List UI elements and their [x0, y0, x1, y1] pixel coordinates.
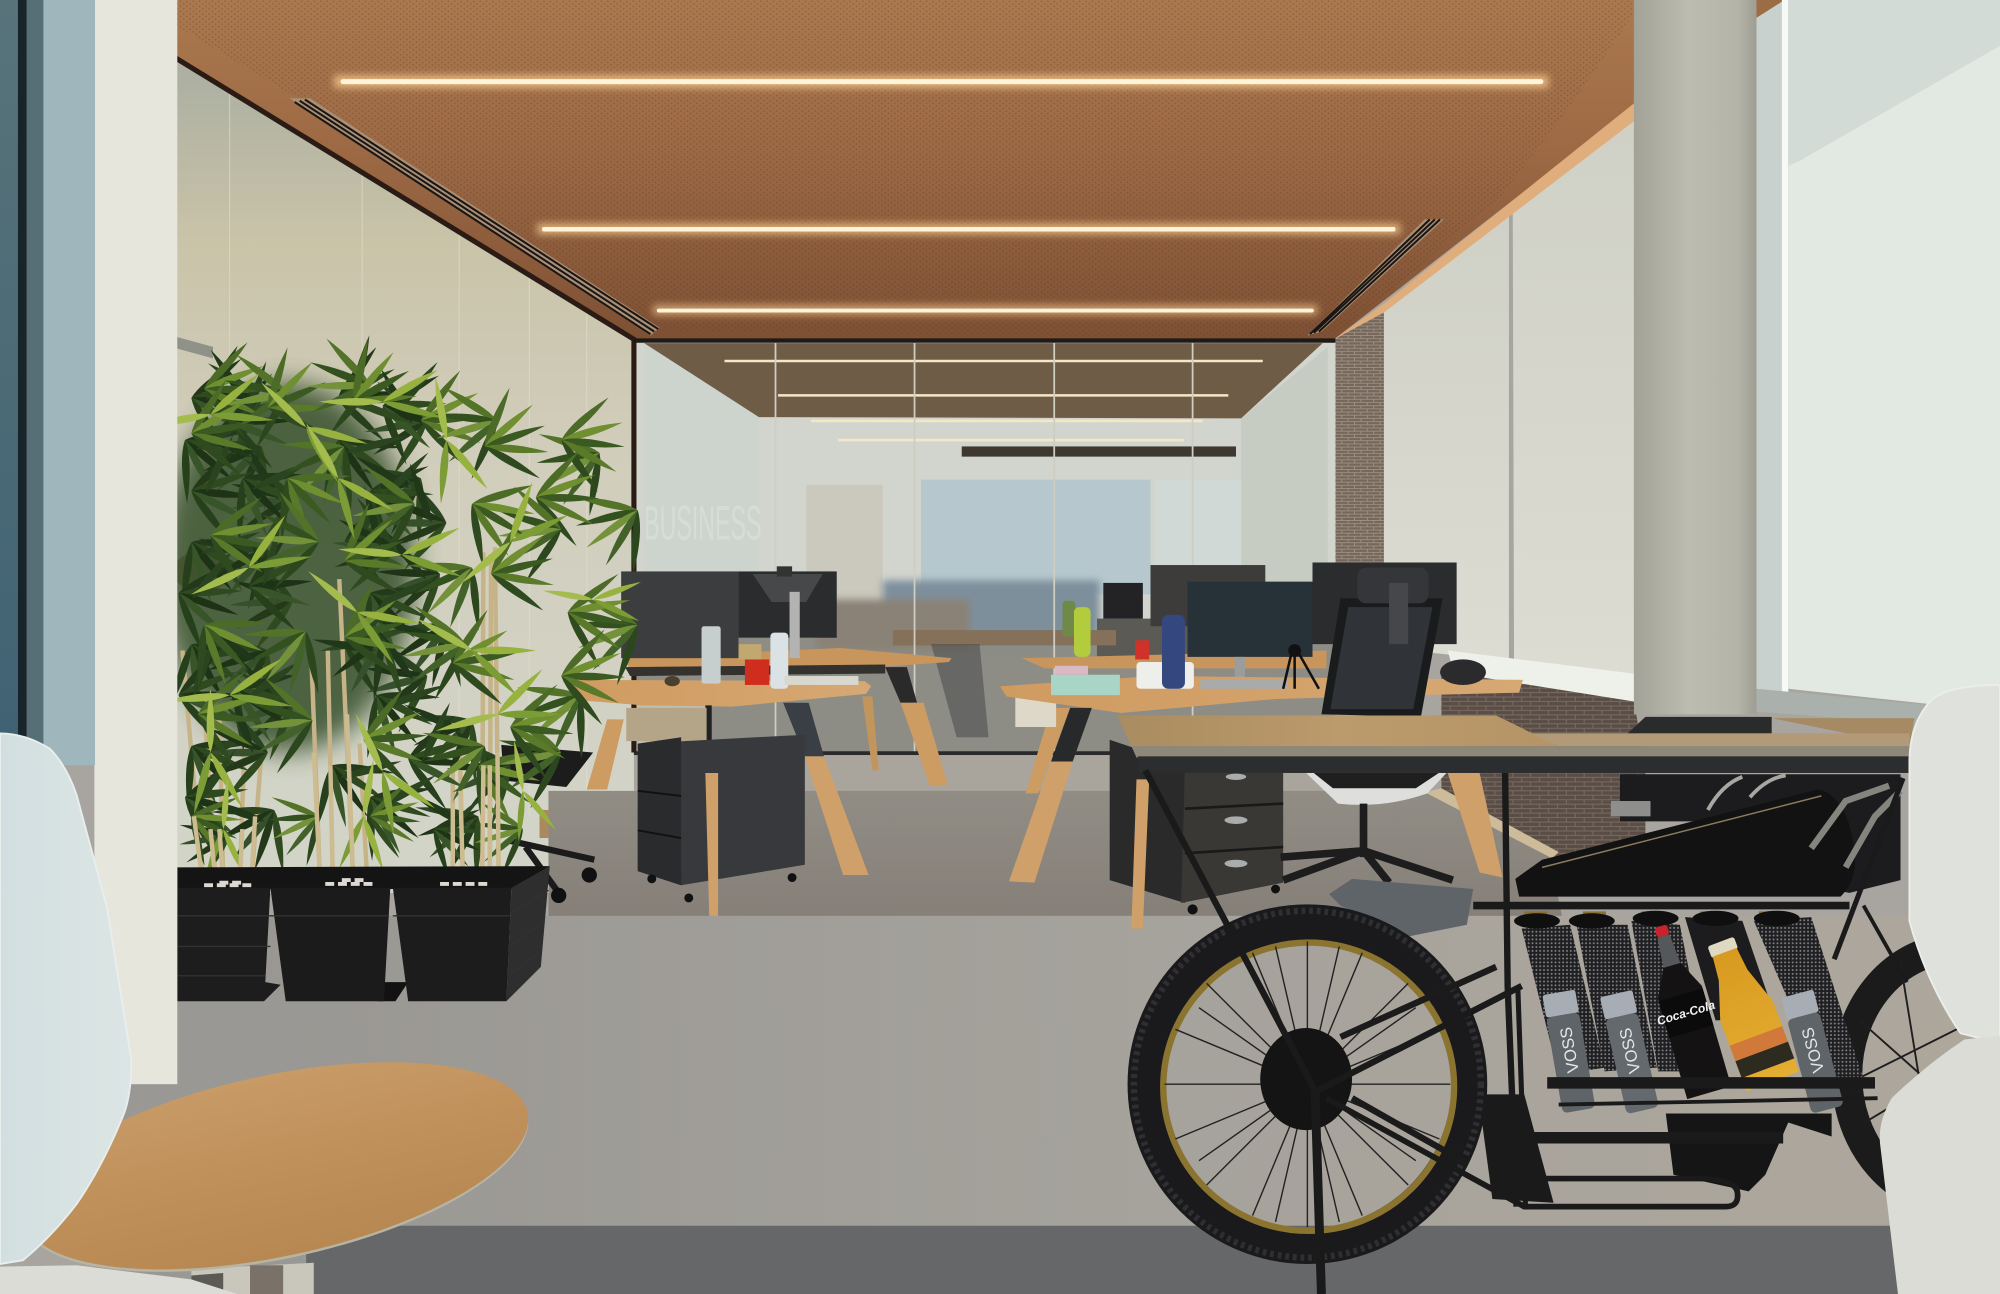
- bike table top: [1117, 716, 1909, 773]
- main floor: [176, 916, 2000, 1228]
- desk items left: [665, 626, 858, 689]
- chrome handlebar: [1811, 786, 1901, 867]
- cola bottle: Coca-Cola: [1655, 998, 1717, 1028]
- cola bottle: [1632, 918, 1738, 1101]
- window sill: [1448, 651, 1634, 703]
- plant foliage: [145, 331, 652, 891]
- front left desk leg: [705, 773, 718, 916]
- right desk legs: [1009, 708, 1503, 883]
- window strip: [1756, 0, 1788, 695]
- left wall top edge: [175, 57, 634, 753]
- far glass meeting room: [634, 339, 1335, 755]
- left desk legs: [587, 703, 869, 875]
- bottle rack mesh: [1514, 911, 1864, 1079]
- cardboard box: [626, 708, 707, 741]
- right blind far: [1384, 212, 1509, 661]
- water bottle three: VOSS: [1798, 1025, 1828, 1075]
- juice bottle: [1694, 932, 1799, 1091]
- baseboard: [1421, 788, 1559, 862]
- white wall pier: [94, 0, 177, 1084]
- bike seat: [1329, 879, 1473, 936]
- left desk top: [568, 680, 871, 707]
- back desks: [624, 648, 1327, 793]
- white armchair left back: [0, 733, 131, 1264]
- monitors right: [1103, 562, 1457, 682]
- back floor band: [634, 755, 1422, 791]
- ceiling light strip two: [537, 223, 1401, 235]
- right drawer unit: [1110, 740, 1283, 915]
- floor dark band: [302, 1226, 2000, 1294]
- monitors left: [621, 566, 837, 658]
- left wall: [176, 57, 638, 893]
- planter rim and pebbles: [177, 866, 550, 889]
- rear wood surface: [1772, 718, 1915, 746]
- chair behind plant: [501, 745, 597, 903]
- right rear wheel: [1847, 948, 2000, 1203]
- ceiling cove light: [1334, 103, 1634, 339]
- water bottle one: VOSS: [1556, 1026, 1583, 1074]
- carpet dark zone: [548, 791, 1562, 918]
- office chair: [1281, 568, 1453, 883]
- bike fuel tank: [1515, 790, 1855, 897]
- brick wall strip: [1335, 307, 1384, 568]
- front bike wheel: [1134, 911, 1496, 1258]
- ceiling light strip three: [653, 305, 1318, 315]
- water bottle three: [1781, 989, 1844, 1114]
- water bottle two: [1600, 990, 1659, 1114]
- ceiling: [176, 0, 1634, 339]
- water bottle two: VOSS: [1616, 1026, 1644, 1075]
- white armchair right seat: [1880, 1036, 2000, 1294]
- desk items right: [1051, 601, 1486, 695]
- bike engine block: [1478, 1094, 1832, 1203]
- blue-grey window frame: [43, 0, 95, 765]
- low table base: [191, 1263, 314, 1294]
- right window: [1756, 0, 2000, 730]
- far glass meeting room: BUSINESS: [644, 497, 761, 551]
- dark mass behind tank: [1611, 774, 1901, 893]
- air slot left: [290, 98, 659, 335]
- lower-left floor: [94, 995, 306, 1294]
- lower brick wall: [1441, 671, 1645, 880]
- bike frame: [1145, 770, 1907, 1294]
- concrete column: [1634, 0, 1756, 714]
- dark object behind table: [1628, 717, 1772, 733]
- water bottle one: [1542, 990, 1595, 1113]
- dark window mullion: [0, 0, 43, 765]
- low wood table: [5, 1024, 546, 1294]
- white armchair right back: [1909, 685, 2000, 1043]
- white armchair left seat: [0, 1265, 237, 1294]
- dark inner ceiling frame: [634, 339, 1335, 342]
- air slot right: [1307, 219, 1444, 335]
- planters: [177, 866, 550, 1001]
- front right desk leg: [1131, 779, 1149, 929]
- left drawer unit: [638, 735, 805, 902]
- right desk top: [1000, 676, 1523, 713]
- right blind near: [1513, 121, 1634, 673]
- ceiling light strip one: [334, 75, 1548, 88]
